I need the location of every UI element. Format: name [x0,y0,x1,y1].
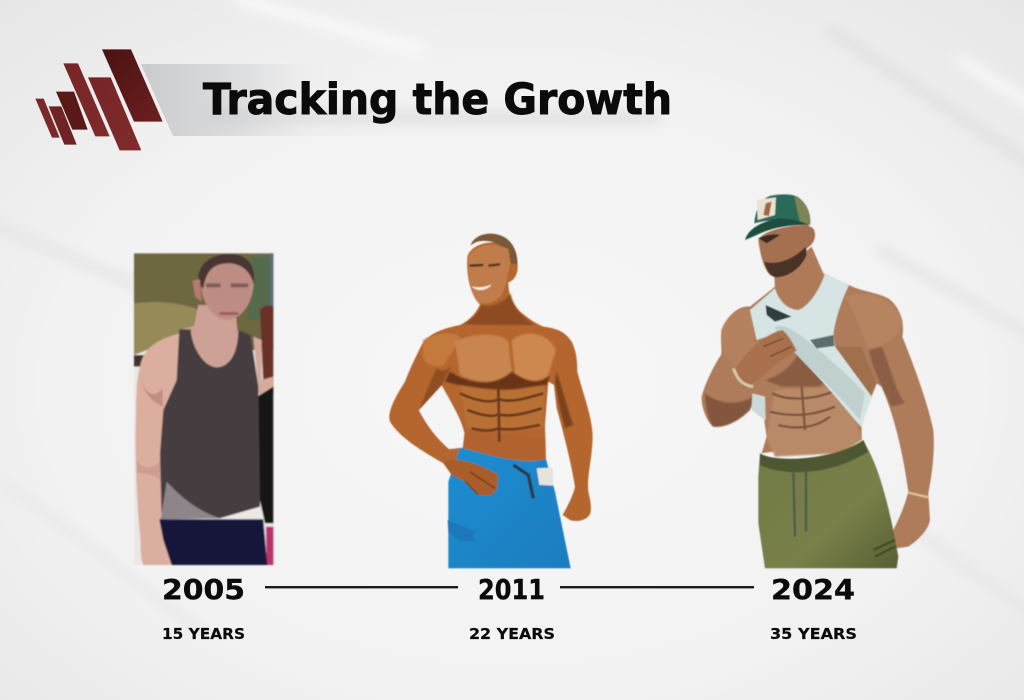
logo: red bars [35,49,163,150]
head [758,225,815,277]
age: 15 years: 15 YEARS [162,625,245,643]
neck and chest [177,305,258,393]
shorts [448,448,571,568]
body silhouette [702,247,934,548]
cap [754,194,810,225]
header band [141,64,660,136]
year: 2024: 2024 [771,573,855,606]
shorts [758,440,898,568]
connector line [560,586,754,588]
hand on chest [735,330,797,388]
right figure [260,306,273,393]
body shading [420,293,573,460]
age: 35 years: 35 YEARS [770,625,857,643]
hair [471,234,517,264]
year: 2005: 2005 [162,573,245,606]
figure: 2024 [702,194,934,568]
tank top [750,273,872,427]
hand on hip [443,460,498,496]
body shading [705,294,905,457]
year: 2011: 2011 [478,573,545,606]
neck [774,253,820,308]
face [468,245,511,304]
gap between arm and waist [419,386,464,449]
connector line [265,586,458,588]
title: Tracking the Growth [203,75,672,125]
abs [770,387,837,430]
figure: 2011 [389,234,593,568]
head [202,262,254,320]
tank top [160,329,260,518]
photo: 2005 [134,253,273,565]
body silhouette [389,242,593,521]
abs [460,388,543,442]
foliage [134,253,273,350]
timeline [162,573,857,643]
age: 22 years: 22 YEARS [469,625,555,643]
left arm [136,333,180,565]
trousers [159,519,267,565]
